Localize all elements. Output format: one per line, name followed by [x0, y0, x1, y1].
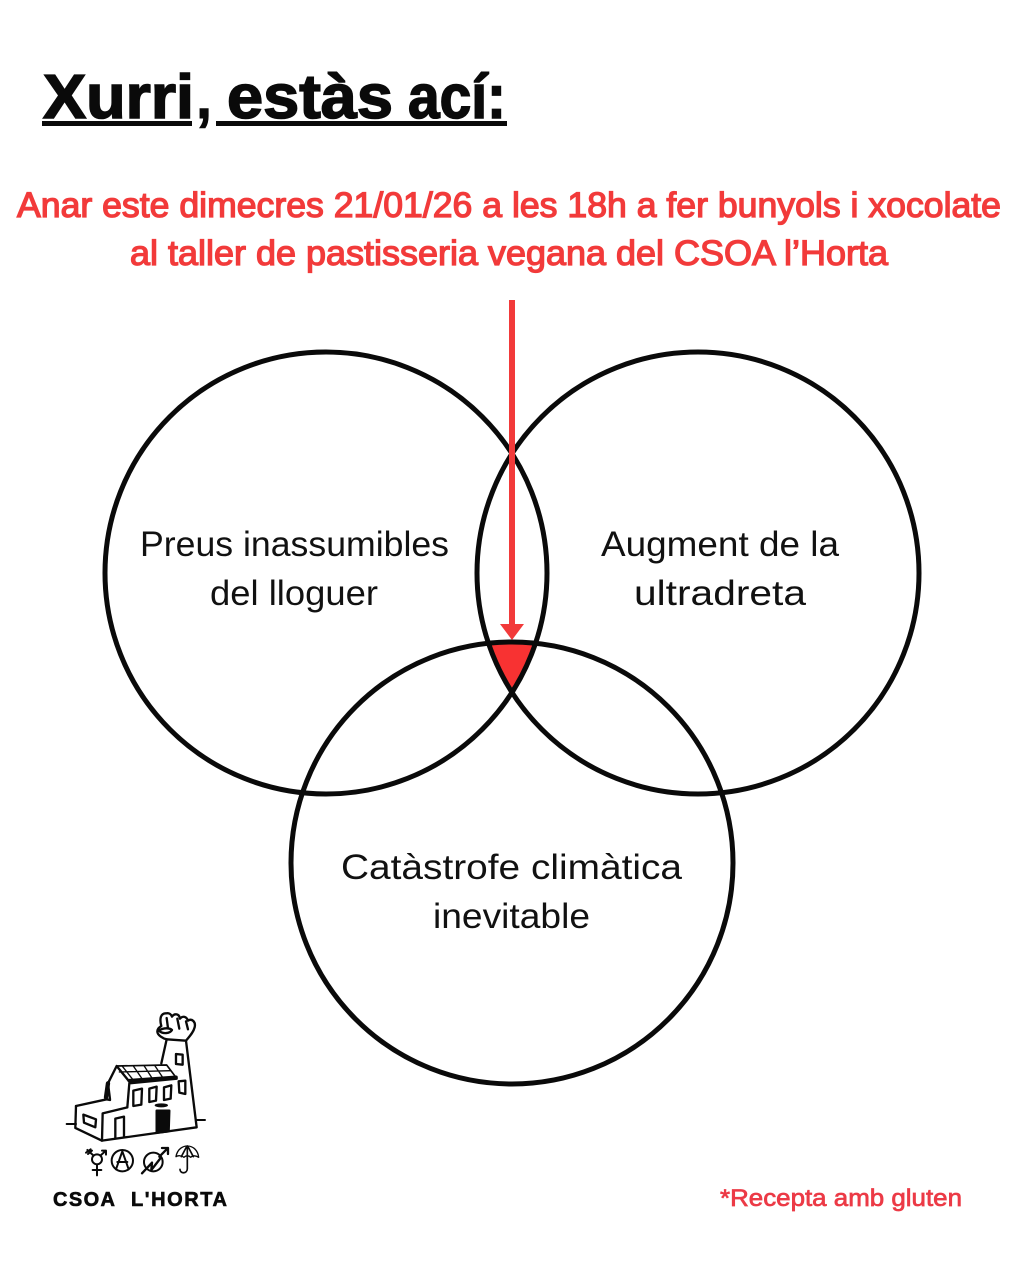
subtitle: event announcement: Anar este dimecres 21/01/26 a les 18h a fer bunyols i xocolate: [17, 186, 1001, 225]
label: far right: ultradreta: [634, 574, 807, 613]
arrow pointing to intersection: [500, 300, 524, 640]
title: estàs: [227, 63, 393, 132]
icon: anarchy symbol: [112, 1150, 133, 1171]
icon: trans symbol: [92, 1154, 102, 1164]
title: Xurri: [43, 63, 194, 132]
title: ,: [196, 63, 212, 132]
label: climate catastrophe: inevitable: [433, 897, 590, 936]
venn circle: far right: [477, 352, 919, 794]
label: far right: Augment de la: [601, 525, 840, 564]
icon: building with raised fist tower: [67, 1013, 205, 1175]
subtitle: event announcement: [17, 186, 1001, 273]
label: rent prices: Preus inassumibles: [140, 525, 449, 564]
logo: CSOA l'Horta: [53, 1013, 227, 1211]
label: far right: [601, 525, 840, 613]
logo wordmark: CSOA: [53, 1189, 115, 1211]
footnote: gluten: *Recepta amb gluten: [720, 1185, 962, 1212]
label: rent prices: del lloguer: [210, 574, 378, 613]
venn circle: climate: [291, 642, 733, 1084]
subtitle: event announcement: al taller de pastisseria vegana del CSOA l’Horta: [130, 234, 889, 273]
logo wordmark: [53, 1189, 227, 1211]
title: ací:: [408, 63, 506, 132]
label: climate catastrophe: Catàstrofe climàtica: [341, 848, 683, 887]
icon: arrow circle: [144, 1153, 163, 1171]
venn circle: rent prices: [105, 352, 547, 794]
icon: umbrella: [176, 1146, 199, 1157]
label: climate catastrophe: [341, 848, 683, 936]
logo wordmark: L'HORTA: [131, 1189, 227, 1211]
label: rent prices: [140, 525, 449, 613]
title: [42, 63, 507, 132]
venn intersection: red highlight: [488, 642, 536, 692]
